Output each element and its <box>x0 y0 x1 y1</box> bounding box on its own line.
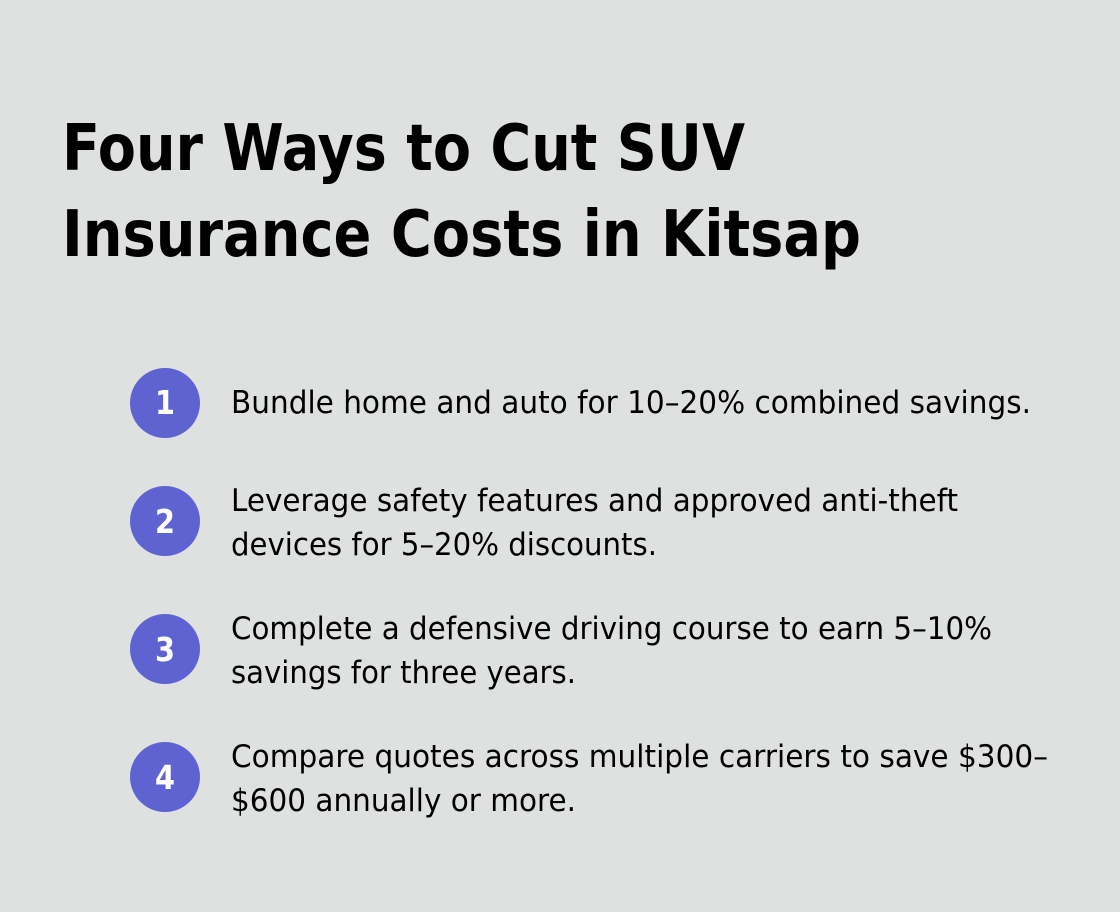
number badge 3 <box>130 614 200 684</box>
step 1 <box>130 368 1031 438</box>
step 3 <box>130 611 992 691</box>
number badge 1: 1 <box>155 383 175 422</box>
number badge 4 <box>130 742 200 812</box>
number badge 2 <box>130 486 200 556</box>
step 2 <box>130 483 958 563</box>
number badge 1 <box>130 368 200 438</box>
step 4 text: Compare quotes across multiple carriers to save $300– <box>231 739 1048 775</box>
number badge 4: 4 <box>155 758 175 797</box>
step 2 text: Leverage safety features and approved anti-theft <box>231 483 958 519</box>
step 4 text: $600 annually or more. <box>231 783 576 819</box>
step 3 text: savings for three years. <box>231 655 576 691</box>
step 1 text: Bundle home and auto for 10–20% combined savings. <box>231 385 1031 421</box>
step 2 text: devices for 5–20% discounts. <box>231 527 657 563</box>
number badge 2: 2 <box>155 502 175 541</box>
step 2 text <box>231 483 958 563</box>
step 3 text <box>231 611 992 691</box>
title <box>62 112 861 272</box>
number badge 3: 3 <box>155 630 175 669</box>
step 4 text <box>231 739 1048 819</box>
title: Four Ways to Cut SUV <box>62 112 745 186</box>
step 4 <box>130 739 1048 819</box>
step 3 text: Complete a defensive driving course to earn 5–10% <box>231 611 992 647</box>
title: Insurance Costs in Kitsap <box>62 198 861 272</box>
